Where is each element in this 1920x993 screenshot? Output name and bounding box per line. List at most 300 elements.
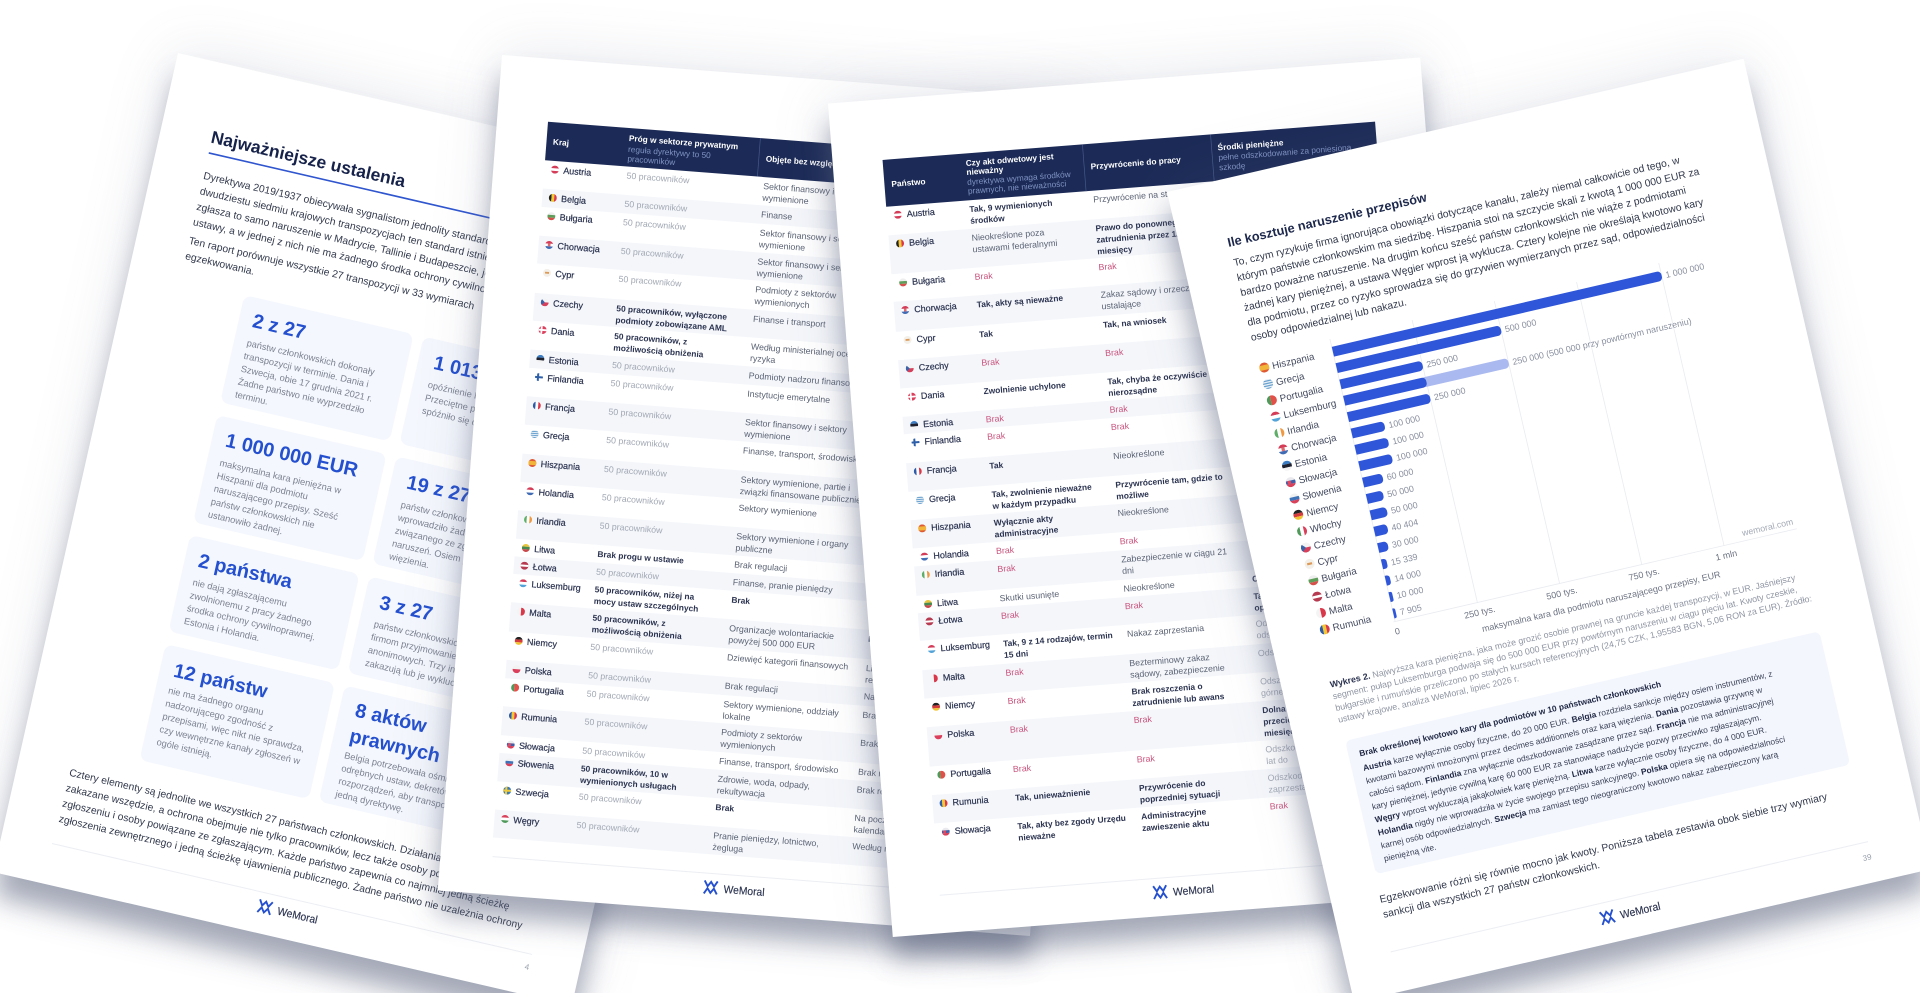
row: Portugalia: lokalne	[722, 711, 751, 723]
row: Portugalia: lat do	[1266, 754, 1288, 766]
country labels: Chorwacja	[1290, 433, 1338, 454]
table header: Objęte bez względu na liczbę	[765, 154, 880, 172]
row: Irlandia: Brak	[997, 563, 1016, 574]
row: Malta: Bezterminowy zakaz	[1129, 652, 1210, 668]
row: Polska	[505, 660, 998, 716]
value labels: 15 339	[1390, 552, 1419, 567]
row: Niemcy: górne limity	[1261, 685, 1307, 698]
row: Chorwacja: Chorwacja	[914, 301, 957, 314]
table header: Środki pieniężne	[1217, 136, 1284, 152]
stat card: 2 z 27: Żadne państwo nie wyprzedziło	[237, 377, 365, 415]
closing text: Egzekwowanie różni się równie mocno jak kwoty. Poniższa tabela zestawia obok siebie trzy wymiary	[1379, 792, 1829, 906]
page 4: cost of breach chart page	[1167, 59, 1920, 993]
row: Portugalia: Brak regulacji	[862, 710, 916, 724]
footer logo: WeMoral	[276, 906, 319, 927]
row: Finlandia: Brak	[1111, 421, 1130, 432]
stat card: 2 państwa: nie dają zgłaszającemu	[192, 577, 288, 609]
country labels: Portugalia	[1279, 384, 1325, 405]
table header: Częstotliwość	[904, 164, 960, 178]
row: Francja: Nieokreślone	[1113, 447, 1165, 461]
row: Dania: Tak, chyba że oczywiście	[1107, 369, 1208, 386]
table header: Próg w sektorze prywatnym	[629, 133, 739, 151]
row: Dania: Według ministerialnej oceny	[751, 341, 861, 360]
row: Holandia	[526, 486, 817, 519]
row: Niemcy: Brak roszczenia o	[1131, 681, 1203, 697]
row: Hiszpania	[911, 482, 1405, 548]
row: Malta	[509, 602, 1003, 669]
table header	[545, 122, 1040, 198]
closing text: zgłoszeniu i osoby powiązane ze zgłaszającym. Każde państwo zapewnia co najmniej jedną ścieżkę	[61, 799, 511, 913]
row: Belgia: 50 pracowników	[624, 199, 688, 214]
page 1: key findings	[0, 53, 757, 993]
row: Polska	[927, 689, 1422, 767]
row: Łotwa	[918, 575, 1412, 641]
row: Chorwacja: 50 pracowników	[620, 246, 685, 261]
table header: prawnych, nie nieważności	[968, 178, 1067, 196]
row: Hiszpania: Hiszpania	[540, 459, 580, 472]
row: Luksemburg: Tak, 9 z 14 rodzajów, termin	[1003, 630, 1113, 648]
value labels: 500 000	[1504, 317, 1537, 334]
stat card: 19 z 27: związanego ze zgłaszaniem	[394, 525, 509, 561]
row: Irlandia: publiczne	[735, 543, 773, 555]
chart caption: Wykres 2. Najwyższa kara pieniężna, jaka może grozić osobie prawnej na gruncie każdej transpozycji, w EUR. Jaśniejszy	[1329, 572, 1797, 690]
row: Rumunia: wymienionych	[719, 739, 776, 753]
row: Węgry: Według rozporządzenia	[852, 841, 945, 858]
table header: Czy akt odwetowy jest	[965, 151, 1054, 168]
stat card: 1 013: opóźnienie Polski.	[427, 380, 502, 406]
row: Słowacja: Brak regulacji	[858, 767, 912, 781]
row: Rumunia: Przywrócenie do	[1139, 778, 1206, 793]
row: Malta: Malta	[942, 671, 965, 683]
row: Irlandia: Irlandia	[934, 567, 965, 579]
row: Cypr: wymienionych	[753, 296, 810, 310]
stat card: 8 aktów prawnych: prawnych	[347, 725, 442, 767]
row: Hiszpania: administracyjne	[994, 524, 1059, 539]
row: Belgia	[541, 189, 1034, 245]
row: Bułgaria: Bułgaria	[912, 274, 945, 287]
row: Portugalia: Sektory wymienione, oddziały	[723, 699, 840, 718]
row: Polska: Brak regulacji	[724, 681, 778, 695]
row: Węgry: 50 pracowników	[576, 820, 640, 835]
footer logo	[1600, 899, 1662, 926]
country labels: Grecja	[1275, 371, 1306, 388]
row: Słowacja: Brak	[1269, 800, 1289, 811]
row: Słowacja	[941, 800, 1290, 849]
intro text	[1233, 152, 1715, 344]
stat card: 3 z 27: zakazują lub je wykluczają.	[364, 658, 475, 693]
row: Malta: możliwością obniżenia	[591, 624, 682, 641]
row: Polska: Polska	[524, 665, 552, 677]
stat card: 1 013: Przeciętne państwo	[424, 393, 505, 421]
row: Niemcy: Niemcy	[527, 637, 558, 649]
stat card: 1 000 000 EUR: ustanowiło żadnej.	[207, 509, 284, 536]
row: Litwa	[924, 571, 1292, 609]
row: Austria: środków	[970, 213, 1006, 226]
row: Szwecja: 50 pracowników	[578, 792, 643, 806]
row: Chorwacja: Zakaz sądowy i orzeczenia	[1100, 282, 1206, 300]
stat card: 12 państw: czy wewnętrzne kanały zgłoszeń w	[159, 724, 301, 766]
intro text: bardzo poważne naruszenie. Na drugim końcu sześć państw członkowskich nie wiąże z podmiotami	[1240, 185, 1687, 299]
row: Francja	[906, 425, 1401, 492]
row: Rumunia: Odszkodowanie	[1267, 768, 1331, 783]
row: Finlandia: Instytucje emerytalne	[747, 389, 831, 405]
closing text: sankcji dla wszystkich 27 państw członkowskich.	[1382, 860, 1601, 921]
row: Estonia	[903, 379, 1396, 434]
axis labels: wemoral.com	[1740, 517, 1794, 538]
row: Słowacja: Administracyjne	[1141, 806, 1207, 821]
country labels: Niemcy	[1305, 501, 1340, 519]
row: Belgia: miesięcy	[1097, 244, 1133, 256]
closing text: zgłoszenia zewnętrznego i jedną ścieżkę ujawnienia publicznego. Żadne państwo nie uzależnia ochrony	[58, 812, 525, 932]
page number: 4	[524, 962, 531, 972]
row: Finlandia: Brak	[987, 430, 1006, 442]
row: Dania: 50 pracowników, z	[614, 331, 688, 347]
stat card: 2 z 27	[220, 295, 414, 441]
row: Litwa: Skutki usunięte	[999, 589, 1060, 603]
row: Czechy: Finanse i transport	[753, 314, 827, 329]
row: Estonia: 50 pracowników	[612, 360, 676, 375]
row: Chorwacja: Chorwacja	[557, 241, 600, 254]
closing text: Cztery elementy są jednolite we wszystkich 27 państwach członkowskich. Działania odwetowe są	[68, 768, 504, 879]
row: Luksemburg	[927, 614, 1319, 666]
stat card: 2 z 27: transpozycji w terminie. Dania i	[243, 351, 370, 389]
stat card: 2 z 27: terminu.	[234, 389, 269, 407]
bar chart: maximum fines	[1259, 263, 1797, 634]
row: Litwa: Litwa	[937, 597, 958, 608]
row: Estonia: Brak	[1109, 403, 1129, 415]
intro text: żadnej kary pieniężnej, a ustawa Węgier wprost ją wyklucza. Cztery kolejne nie określają kwotowo kary	[1243, 197, 1705, 314]
row: Słowenia: rekultywacja	[716, 785, 765, 799]
stat card: 1 000 000 EUR: Hiszpanii dla podmiotu	[216, 471, 309, 501]
row: Rumunia: Podmioty z sektorów	[721, 727, 803, 743]
callout: no fixed fines: kwotami bazowymi mnożonymi przez decimes additionnels oraz karą więzienia. Dania pozostawia grzywnę w	[1365, 684, 1764, 786]
value labels: 1 000 000	[1664, 261, 1705, 280]
row: Chorwacja	[894, 264, 1388, 332]
country labels: Włochy	[1309, 518, 1343, 536]
row: Rumunia: Rumunia	[521, 712, 558, 724]
row: Węgry: Węgry	[513, 815, 540, 827]
row: Niemcy: Dziewięć kategorii finansowych	[727, 652, 849, 672]
row: Dania: Dania	[551, 326, 575, 338]
row: Luksemburg: Odszkodowanie	[1255, 614, 1319, 629]
value labels: 100 000	[1387, 413, 1421, 430]
row: Austria: Przywrócenie na stanowisko	[1093, 186, 1204, 205]
row: Niemcy: Brak	[1007, 695, 1027, 706]
row: Belgia: zatrudnienia przez 12	[1096, 228, 1182, 245]
row: Francja: Francja	[545, 402, 575, 414]
row: Austria: Sektor finansowy i sektory	[763, 181, 866, 199]
stat card: 19 z 27	[372, 456, 566, 603]
row: Dania: nierozsądne	[1108, 384, 1158, 398]
country labels	[1258, 349, 1387, 637]
footer logo	[704, 880, 765, 899]
row: Belgia: ustawami federalnymi	[972, 238, 1058, 254]
row: Polska: Brak	[1009, 723, 1029, 735]
row: Irlandia: Zabezpieczenie w ciągu 21	[1121, 546, 1228, 564]
row: Belgia: Finanse	[761, 209, 793, 222]
country labels: Estonia	[1294, 452, 1329, 470]
callout: no fixed fines: Brak określonej kwotowo kary dla podmiotów w 10 państwach członkowskich	[1358, 679, 1662, 758]
row: Austria	[550, 165, 866, 210]
country labels: Łotwa	[1324, 584, 1353, 601]
row: Irlandia: 50 pracowników	[599, 521, 664, 535]
row: Polska: przeciętne	[1263, 714, 1305, 727]
table header: dyrektywa wymaga środków	[967, 169, 1072, 187]
row: Łotwa: Finanse, pranie pieniędzy	[732, 577, 834, 595]
row: Węgry	[493, 810, 987, 875]
row: Cypr: 50 pracowników	[618, 274, 682, 289]
row: Malta: sądowy, zabezpieczenie	[1130, 662, 1225, 680]
table header: pracowników	[627, 153, 676, 167]
stat card: 12 państw: przepisami, więc nikt nie sprawdza,	[162, 711, 305, 754]
row: Malta: Brak	[1005, 666, 1024, 678]
row: Litwa	[521, 543, 788, 573]
row: Estonia	[529, 350, 1022, 406]
intro text: dwudziestu siedmiu krajowych transpozycjach ten standard istnieje tylko	[199, 186, 523, 271]
row: Polska: 50 pracowników	[588, 670, 652, 685]
footer logo: WeMoral	[723, 884, 765, 899]
row: Czechy	[533, 293, 1026, 358]
row: Cypr	[542, 268, 837, 312]
row: Hiszpania: 50 pracowników	[604, 464, 668, 479]
axis labels: maksymalna kara dla podmiotu naruszającego przepisy, EUR	[1481, 569, 1722, 634]
intro text: To, czym ryzykuje firma ignorująca obowiązki dotyczące kanału, zależy niemal całkowicie od tego, w	[1233, 155, 1681, 269]
row: Dania: możliwością obniżenia	[613, 343, 704, 359]
row: Hiszpania: związki finansowane publicznie	[739, 486, 862, 505]
axis labels: 0	[1394, 626, 1401, 637]
stat card: 1 000 000 EUR: maksymalna kara pieniężna w	[219, 458, 342, 496]
stat card: 3 z 27: anonimowych. Trzy inne	[367, 645, 466, 677]
row: Finlandia: 50 pracowników	[610, 378, 674, 393]
intro text	[184, 171, 532, 338]
stat card: 19 z 27: więzienia.	[387, 551, 430, 570]
row: Słowacja: Finanse, transport, środowisko	[719, 756, 839, 775]
row: Dania: Zwolnienie uchylone	[983, 380, 1066, 396]
row: Cypr: Cypr	[916, 333, 936, 344]
row: Finlandia	[911, 421, 1130, 448]
row: Bułgaria: 50 pracowników	[623, 217, 687, 232]
value labels: 50 000	[1390, 500, 1419, 516]
row: Malta: powyżej 500 000 EUR	[728, 635, 815, 651]
row: Hiszpania: Sektory wymienione, partie i	[740, 474, 851, 493]
stat card: 1 000 000 EUR	[193, 415, 387, 561]
row: Luksemburg: Luksemburg	[531, 579, 581, 593]
row: Portugalia: Odszkodowanie	[1265, 740, 1328, 755]
row: Cypr: Podmioty z sektorów	[755, 284, 837, 301]
value labels: 40 404	[1390, 517, 1419, 533]
country labels: Słowacja	[1298, 467, 1339, 487]
row: Malta: Odszkodowanie	[1258, 643, 1321, 658]
row: Austria: wymienione	[761, 193, 809, 206]
row: Chorwacja: Tak, akty są nieważne	[976, 293, 1064, 309]
row: Rumunia: Rumunia	[952, 795, 989, 808]
chart caption: ustawy krajowe, analiza WeMoral, lipiec 2026 r.	[1337, 673, 1520, 725]
stat card: 1 000 000 EUR: państw członkowskich nie	[210, 496, 316, 530]
row: Francja: wymienione	[743, 429, 791, 442]
row: Luksemburg: 50 pracowników, niżej na	[594, 584, 695, 602]
row: Bułgaria	[899, 261, 1118, 288]
table header: szkodę	[1219, 160, 1246, 172]
stat card: 1 000 000 EUR: 1 000 000 EUR	[223, 430, 360, 482]
callout: no fixed fines: Węgry wprost wykluczają jakąkolwiek karę pieniężną. Litwa karze wyłącznie osoby fizyczne, do 4 000 EUR.	[1374, 724, 1768, 825]
row: Słowenia: 50 pracowników, 10 w	[581, 763, 669, 780]
page 3: remedies table	[828, 57, 1485, 959]
row: Rumunia: Brak regulacji	[860, 738, 914, 752]
heading: Najważniejsze ustalenia: Najważniejsze ustalenia	[209, 127, 408, 191]
intro text: zgłasza to samo naruszenie w Madrycie, Tallinie i Budapeszcie, jest	[195, 202, 499, 282]
row: Dania	[908, 369, 1209, 414]
heading: Ile kosztuje naruszenie przepisów: Ile kosztuje naruszenie przepisów	[1226, 189, 1428, 250]
row: Słowenia: wymienionych usługach	[579, 775, 677, 792]
row: Rumunia: Tak, unieważnienie	[1015, 787, 1091, 803]
callout: no fixed fines: karnej osób odpowiedzialnych. Szwecja ma zamiast tego nieograniczony kwotowo nakaz zabezpieczony karą	[1380, 749, 1779, 851]
row: Litwa: Brak regulacji	[734, 559, 788, 573]
stat card: 8 aktów prawnych: jedną dyrektywę.	[334, 789, 405, 814]
row: Hiszpania: Nieokreślone	[1117, 504, 1169, 518]
callout: no fixed fines: pieniężną vite.	[1383, 842, 1437, 863]
row: Austria: 50 pracowników	[626, 171, 690, 185]
row: Szwecja: Brak	[715, 802, 735, 813]
value labels: 7 905	[1399, 602, 1423, 617]
row: Hiszpania: Hiszpania	[931, 520, 971, 533]
row: Szwecja: kalendarzowego	[853, 824, 918, 839]
row: Słowenia: Słowenia	[517, 758, 554, 771]
row: Irlandia: Sektory wymienione i organy	[736, 531, 849, 550]
stat card: 12 państw	[139, 644, 335, 799]
footer logo: WeMoral	[1173, 883, 1215, 899]
row: Luksemburg: Nakaz zaprzestania	[1127, 623, 1205, 639]
row: Luksemburg	[518, 578, 751, 618]
row: Holandia: Holandia	[538, 487, 574, 500]
stat card: 2 z 27: Szwecja, obie 17 grudnia 2021 r.	[240, 364, 373, 404]
row: Czechy	[898, 322, 1393, 389]
table header: pełne odszkodowanie za poniesioną	[1218, 142, 1352, 162]
row: Portugalia: Brak	[1013, 763, 1032, 774]
chart caption: segment: pułap Luksemburga podwaja się do 500 000 EUR przy powtórnym naruszeniu w ciągu pięciu lat. Kwoty czeskie,	[1332, 584, 1798, 701]
row: Irlandia: dni	[1122, 565, 1134, 576]
row: Portugalia	[937, 740, 1329, 792]
value labels: 14 000	[1393, 568, 1422, 584]
row: Chorwacja: wymienione	[755, 268, 803, 282]
row: Portugalia: Portugalia	[523, 684, 564, 697]
footer logo	[1153, 881, 1215, 900]
table header: Przywrócenie do pracy	[1090, 154, 1182, 171]
stat card: 8 aktów prawnych	[319, 685, 514, 841]
row: Finlandia: Finlandia	[924, 434, 961, 447]
row: Portugalia: 50 pracowników	[586, 689, 651, 703]
row: Niemcy: zatrudnienie lub awans	[1132, 691, 1225, 708]
stat card: 8 aktów prawnych: odrębnych ustaw, dekretów i	[340, 763, 457, 799]
stat card: 1 013: 1 013 dni	[432, 352, 519, 393]
row: Litwa: Całkowite	[1252, 571, 1292, 584]
callout: no fixed fines: Austria karze wyłącznie osoby fizyczne, do 20 000 EUR. Belgia rozdziela sankcje między osiem instrumentów, z	[1362, 669, 1773, 773]
row: Łotwa: Brak	[1001, 609, 1020, 621]
stat card: 3 z 27: państw członkowskich nakazuje	[373, 619, 503, 658]
row: Holandia: Brak	[996, 545, 1015, 556]
row: Irlandia	[516, 510, 1010, 576]
callout: no fixed fines	[1345, 631, 1850, 874]
stat card: 19 z 27: 19 z 27	[405, 472, 473, 508]
table header: reguła dyrektywy to 50	[628, 144, 712, 160]
row: Szwecja: Szwecja	[515, 787, 549, 799]
row: Dania	[537, 325, 861, 371]
row: Niemcy: 50 pracowników	[590, 642, 654, 657]
row: Cypr: Tak, na wniosek	[1103, 315, 1167, 330]
value labels: 10 000	[1396, 585, 1424, 601]
row: Holandia: 50 pracowników	[601, 492, 666, 507]
country labels: Luksemburg	[1283, 398, 1338, 421]
row: Bułgaria: Brak	[974, 270, 994, 282]
row: Czechy: Brak	[1105, 347, 1124, 358]
table header: Kraj	[553, 137, 569, 148]
stat card: 12 państw: nadzorującego zgodność z	[164, 698, 275, 733]
row: Malta	[922, 632, 1417, 699]
table header: Państwo	[891, 176, 926, 189]
row: Dania: ryzyka	[750, 353, 776, 365]
country labels: Irlandia	[1286, 419, 1321, 437]
page 2: threshold table	[438, 55, 1094, 958]
intro text: Dyrektywa 2019/1937 obiecywała sygnalistom jednolity standard. W	[202, 171, 508, 252]
row: Słowenia: Brak regulacji	[856, 784, 910, 799]
heading rule	[209, 153, 688, 264]
row: Dania: Dania	[921, 389, 945, 401]
row: Węgry: Pranie pieniędzy, lotnictwo,	[713, 830, 819, 848]
row: Grecja: Grecja	[929, 492, 956, 504]
row: Cypr: Tak	[979, 328, 994, 339]
closing text: zakazane wszędzie, a ochrona obejmuje nie tylko pracowników, lecz także osoby pomagające	[65, 783, 486, 891]
row: Cypr: Cypr	[555, 269, 575, 280]
row: Polska: Dolna granica	[1262, 701, 1318, 715]
row: Belgia: Belgia	[909, 236, 934, 248]
row: Luksemburg: odsetki	[1256, 628, 1285, 640]
row: Malta: Malta	[529, 608, 552, 619]
row: Belgia: Prawo do ponownego	[1095, 217, 1183, 233]
row: Francja: Tak	[989, 460, 1004, 471]
row: Luksemburg: mocy ustaw szczególnych	[594, 596, 699, 614]
row: Hiszpania: Wyłącznie akty	[993, 513, 1054, 528]
row: Hiszpania	[520, 454, 1014, 520]
row: Niemcy: regulacji	[865, 675, 898, 687]
stat card: 2 państwa: 2 państwa	[196, 550, 295, 593]
country labels: Czechy	[1313, 534, 1347, 552]
stat card: 3 z 27: 3 z 27	[377, 592, 435, 626]
axis labels: 1 mln	[1714, 548, 1738, 563]
row: Rumunia	[932, 757, 1427, 824]
row: Estonia: Estonia	[548, 355, 579, 367]
country labels: Cypr	[1317, 553, 1340, 568]
row: Grecja: Finanse, transport, środowisko	[743, 445, 863, 465]
row: Holandia: Holandia	[933, 548, 969, 561]
row: Austria	[893, 186, 1205, 232]
row: Luksemburg: 15 dni	[1004, 648, 1029, 660]
row: Irlandia	[914, 528, 1409, 596]
row: Grecja: Przywrócenie tam, gdzie to	[1115, 471, 1223, 490]
row: Rumunia: poprzedniej sytuacji	[1140, 788, 1221, 805]
row: Finlandia: Finlandia	[547, 373, 584, 386]
row: Słowacja	[506, 740, 912, 781]
row: Niemcy: Niemcy	[945, 699, 976, 711]
row: Rumunia	[501, 706, 995, 773]
row: Polska: Polska	[947, 728, 975, 740]
country labels: Słowenia	[1302, 483, 1343, 503]
row: Bułgaria: Sektor finansowy i sektory	[759, 228, 862, 246]
row: Łotwa: Łotwa	[938, 614, 963, 626]
row: Grecja: w każdym przypadku	[991, 494, 1076, 511]
page number: 39	[1862, 852, 1873, 863]
row: Estonia: Podmioty nadzoru finansowego	[748, 370, 871, 390]
row: Portugalia	[510, 683, 916, 735]
country labels: Rumunia	[1332, 614, 1373, 634]
